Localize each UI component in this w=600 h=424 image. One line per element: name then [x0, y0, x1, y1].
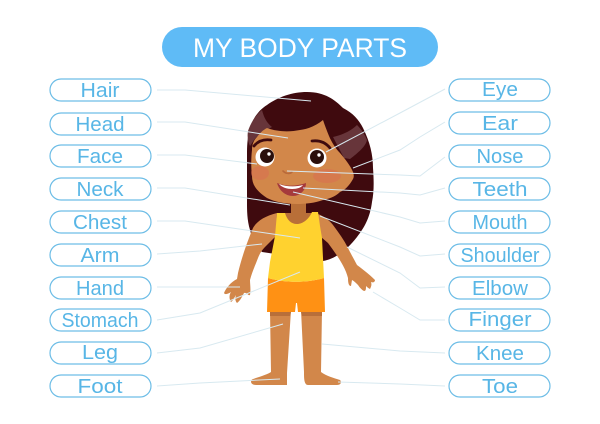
- cheeks: [251, 166, 341, 183]
- label: elbow: Elbow: [472, 278, 529, 300]
- title banner: [162, 27, 438, 67]
- labels: left column: [50, 79, 151, 398]
- label: leg: Leg: [82, 342, 118, 364]
- label: foot: Foot: [78, 376, 123, 398]
- label: mouth: [449, 211, 550, 234]
- labels: right column: [449, 79, 550, 398]
- eyebrows: [254, 140, 330, 148]
- label: arm: [50, 244, 151, 267]
- label: neck: Neck: [76, 179, 125, 201]
- label: ear: Ear: [482, 113, 518, 135]
- label: leg: [50, 342, 151, 364]
- label: toe: [449, 375, 550, 398]
- label: teeth: Teeth: [472, 179, 528, 201]
- label: elbow: [449, 277, 550, 300]
- left arm and hand: [224, 213, 277, 303]
- label: chest: [50, 211, 151, 234]
- label: teeth: [449, 178, 550, 201]
- neck: [277, 200, 318, 226]
- label: hair: Hair: [80, 80, 120, 102]
- label: finger: Finger: [468, 309, 532, 331]
- title banner: MY BODY PARTS: [193, 33, 407, 63]
- label: knee: [449, 342, 550, 365]
- nose: [283, 171, 292, 173]
- connector lines: [157, 89, 445, 386]
- label: eye: [449, 79, 550, 101]
- shirt: [268, 212, 324, 282]
- label: toe: Toe: [482, 376, 518, 398]
- label: hand: Hand: [76, 278, 124, 300]
- label: head: Head: [76, 114, 124, 136]
- label: face: Face: [77, 146, 123, 168]
- hair back: [247, 92, 374, 261]
- label: arm: Arm: [80, 245, 120, 267]
- illustration: girl: [224, 92, 375, 385]
- label: stomach: Stomach: [62, 310, 138, 332]
- label: knee: Knee: [476, 343, 524, 365]
- label: nose: Nose: [476, 146, 524, 168]
- label: chest: Chest: [73, 212, 127, 234]
- label: mouth: Mouth: [472, 212, 528, 234]
- mouth: [277, 183, 306, 196]
- label: head: [50, 113, 151, 136]
- hair highlights: [248, 110, 367, 159]
- label: shoulder: Shoulder: [460, 245, 540, 267]
- right arm and hand: [318, 214, 375, 291]
- label: neck: [50, 178, 151, 201]
- label: nose: [449, 145, 550, 168]
- eyes: [256, 148, 326, 168]
- label: ear: [449, 112, 550, 135]
- legs and feet: [251, 310, 341, 385]
- label: hair: [50, 79, 151, 102]
- label: face: [50, 145, 151, 168]
- shorts: [267, 278, 325, 312]
- face: [251, 120, 354, 204]
- label: foot: [50, 375, 151, 398]
- label: finger: [449, 309, 550, 331]
- label: hand: [50, 277, 151, 300]
- label: eye: Eye: [482, 79, 518, 101]
